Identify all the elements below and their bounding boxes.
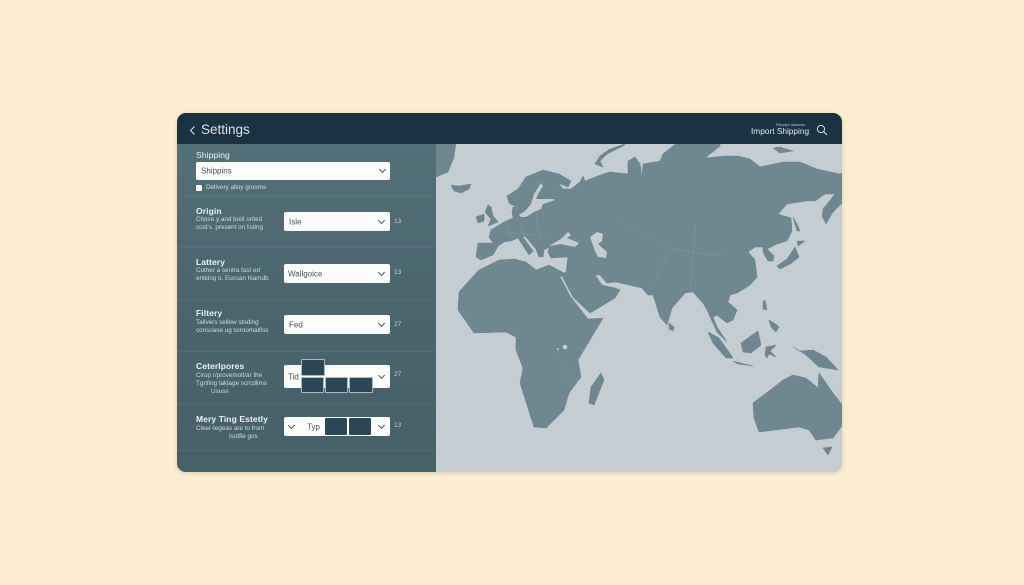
Australia xyxy=(753,373,844,440)
Iceland xyxy=(451,184,471,193)
dropdown xyxy=(284,365,390,388)
New Guinea xyxy=(793,347,838,370)
tile 2 xyxy=(325,377,348,393)
dropdown xyxy=(284,417,390,436)
Baltic Sea xyxy=(519,183,555,217)
Tasmania xyxy=(823,447,832,455)
tile top xyxy=(301,359,325,376)
Caspian Sea xyxy=(590,232,607,258)
Madagascar xyxy=(589,373,604,405)
label: Shipping xyxy=(196,150,230,160)
Sakhalin xyxy=(793,217,800,231)
label: Filtery xyxy=(196,308,222,318)
tile 1 xyxy=(325,418,347,435)
Novaya Zemlya xyxy=(595,144,625,167)
Eurasia xyxy=(476,142,844,342)
African lakes xyxy=(563,345,567,349)
Sulawesi xyxy=(765,345,776,358)
header small text: Receipt address xyxy=(776,122,805,127)
tile 1 xyxy=(301,377,324,393)
title: Settings xyxy=(201,122,250,137)
settings panel xyxy=(177,113,842,472)
Black Sea xyxy=(549,232,579,247)
value: 27 xyxy=(394,321,401,328)
Philippines xyxy=(763,300,779,332)
dropdown: Shippins xyxy=(201,166,232,176)
Severnaya islands xyxy=(773,147,793,153)
dropdown xyxy=(284,315,390,334)
Hokkaido xyxy=(797,241,805,246)
value: 13 xyxy=(394,269,401,276)
label: Lattery xyxy=(196,257,225,267)
group: origin xyxy=(196,206,401,231)
Borneo xyxy=(741,331,761,353)
dropdown: Tid xyxy=(288,372,299,381)
dropdown: Fed xyxy=(289,320,303,329)
Japan xyxy=(777,247,799,269)
dropdown xyxy=(196,162,390,180)
group: filtery xyxy=(196,308,401,334)
Sumatra xyxy=(708,332,733,358)
tile 3 xyxy=(349,377,373,393)
label: Ceterlpores xyxy=(196,361,244,371)
description: Cleer-tegeas are to from Isotfie gos xyxy=(196,425,264,440)
Sri Lanka xyxy=(669,323,674,331)
group: many thing estately xyxy=(196,414,401,440)
land masses xyxy=(436,142,844,455)
dropdown: Typ xyxy=(307,422,320,431)
country borders xyxy=(505,212,722,382)
sidebar xyxy=(177,144,436,472)
dropdown xyxy=(284,264,390,283)
tile 2 xyxy=(349,418,371,435)
header action label: Import Shipping xyxy=(751,126,809,136)
top bar xyxy=(177,113,842,144)
Africa xyxy=(458,259,603,428)
value: 13 xyxy=(394,422,401,429)
checkbox xyxy=(196,185,202,191)
label: Origin xyxy=(196,206,222,216)
description: Cother a sentra fast ed entking o. Eucsan hiamdb xyxy=(196,267,268,282)
group: shipping xyxy=(196,150,390,191)
value: 13 xyxy=(394,218,401,225)
Java xyxy=(733,361,753,366)
description: Cirop r/provemolt/ar the Tgnfing taklage scrcdlims Ususs xyxy=(196,372,267,395)
group: lattery xyxy=(196,257,401,283)
icon: search xyxy=(816,124,828,136)
dropdown: Wallgoice xyxy=(288,269,322,278)
group: categories xyxy=(196,359,401,395)
Greenland xyxy=(436,142,456,177)
Ireland xyxy=(476,214,484,223)
dropdown xyxy=(284,212,390,231)
dropdown: Isle xyxy=(289,217,301,226)
label: Mery Ting Estetly xyxy=(196,414,268,424)
map area xyxy=(436,144,842,472)
inland seas xyxy=(519,183,607,350)
description: Tailvers sellew stoding consoase ug scroomalfiss xyxy=(196,319,268,334)
back arrow xyxy=(190,126,195,135)
description: Chose y and built orited cost's. present on listing xyxy=(196,216,263,231)
value: 27 xyxy=(394,371,401,378)
checkbox label: Delivery alloy grooms xyxy=(206,184,266,191)
Great Britain xyxy=(485,205,498,226)
